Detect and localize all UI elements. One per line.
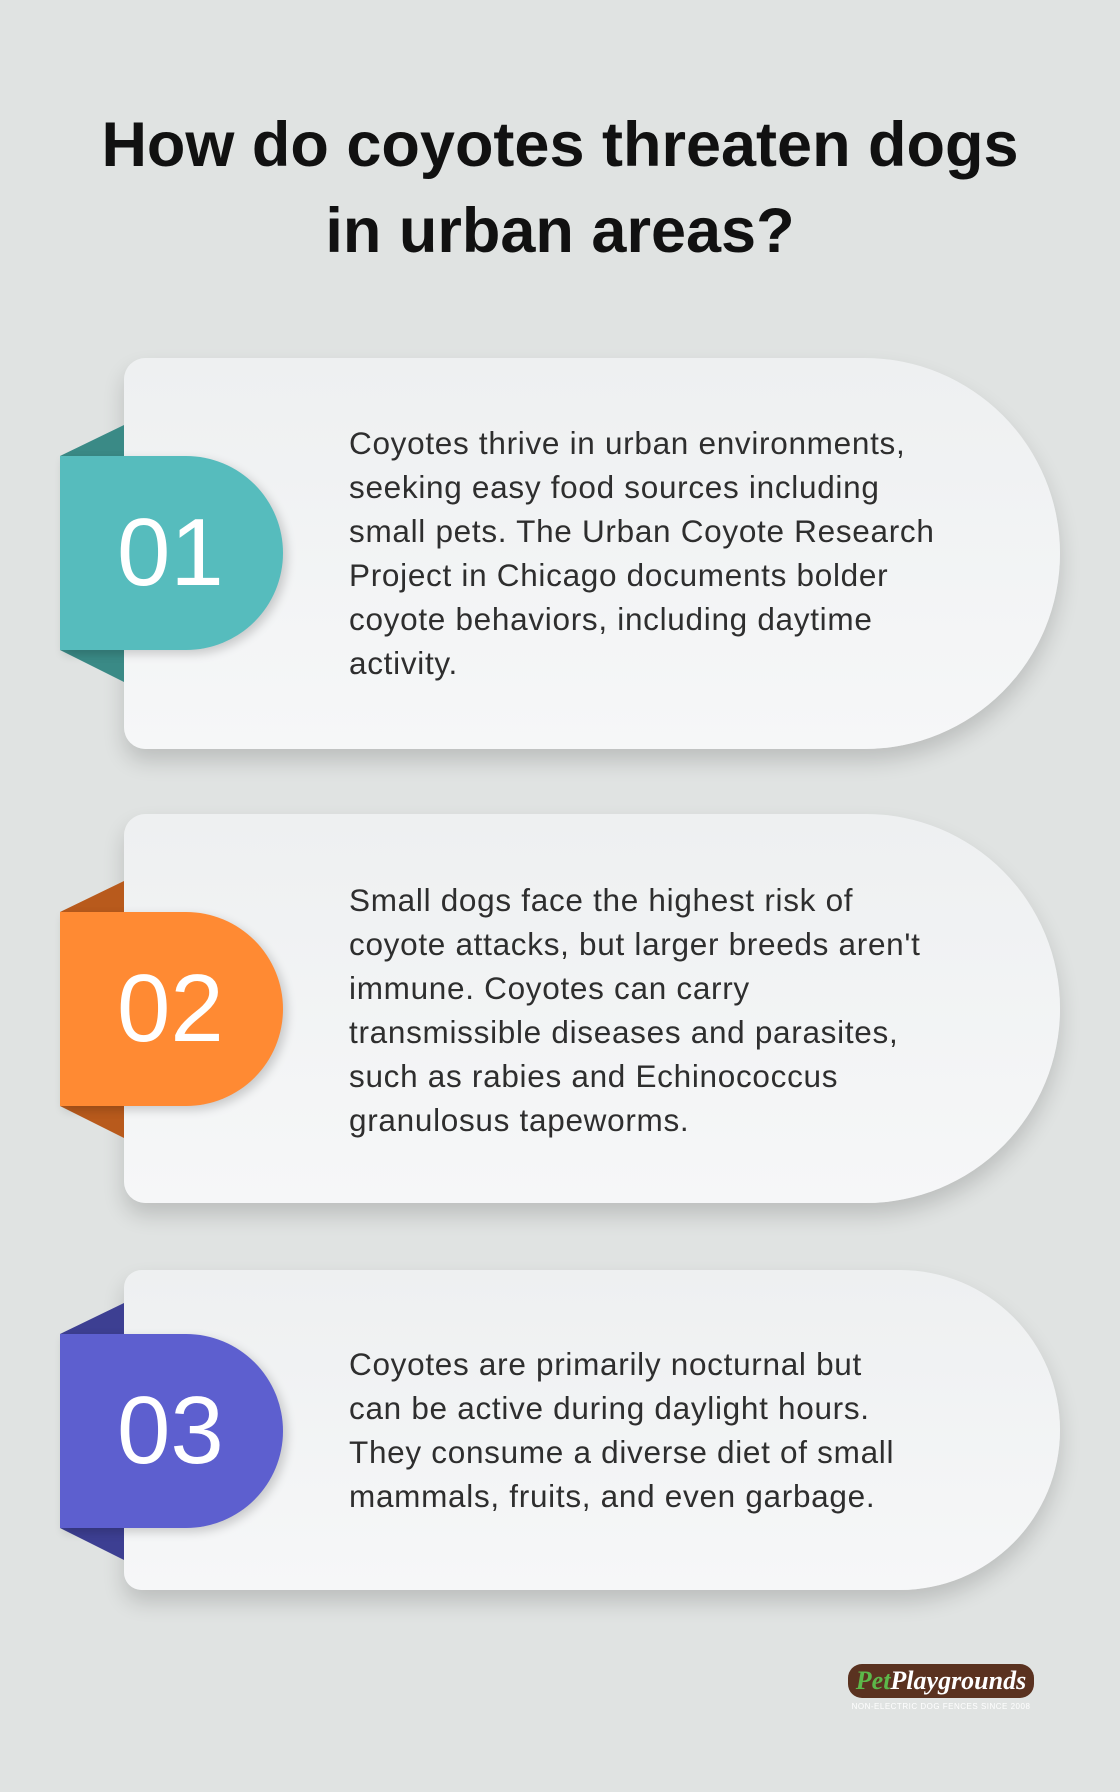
text 3: Coyotes are primarily nocturnal but	[349, 1346, 862, 1382]
text 2: Small dogs face the highest risk of	[349, 882, 853, 918]
flaps 2	[60, 881, 124, 1138]
flaps 1	[60, 425, 124, 682]
title: How do coyotes threaten dogs	[101, 110, 1019, 180]
title: in urban areas?	[325, 196, 795, 266]
badge 01	[60, 456, 283, 650]
text 2: granulosus tapeworms.	[349, 1102, 689, 1138]
text 1: Project in Chicago documents bolder	[349, 557, 888, 593]
text 1: small pets. The Urban Coyote Research	[349, 513, 935, 549]
logo: NON-ELECTRIC DOG FENCES SINCE 2008	[852, 1702, 1030, 1711]
text 2: immune. Coyotes can carry	[349, 970, 750, 1006]
logo	[848, 1664, 1034, 1711]
text 1	[349, 425, 935, 681]
badge 01: 01	[117, 499, 224, 606]
text 3	[349, 1346, 894, 1514]
text 3: mammals, fruits, and even garbage.	[349, 1478, 875, 1514]
text 1: Coyotes thrive in urban environments,	[349, 425, 905, 461]
text 2: transmissible diseases and parasites,	[349, 1014, 898, 1050]
badge 03: 03	[117, 1377, 224, 1484]
text 1: seeking easy food sources including	[349, 469, 880, 505]
text 2: such as rabies and Echinococcus	[349, 1058, 838, 1094]
badge 02	[60, 912, 283, 1106]
text 2: coyote attacks, but larger breeds aren't	[349, 926, 921, 962]
badge 03	[60, 1334, 283, 1528]
title	[101, 110, 1019, 266]
logo: PetPlaygrounds	[856, 1666, 1026, 1695]
text 1: coyote behaviors, including daytime	[349, 601, 873, 637]
text 3: can be active during daylight hours.	[349, 1390, 870, 1426]
flaps 3	[60, 1303, 124, 1560]
text 3: They consume a diverse diet of small	[349, 1434, 894, 1470]
text 1: activity.	[349, 645, 458, 681]
text 2	[349, 882, 921, 1138]
panel: card 2	[124, 814, 1060, 1203]
panel: card 3	[124, 1270, 1060, 1590]
badge 02: 02	[117, 955, 224, 1062]
panel: card 1	[124, 358, 1060, 749]
